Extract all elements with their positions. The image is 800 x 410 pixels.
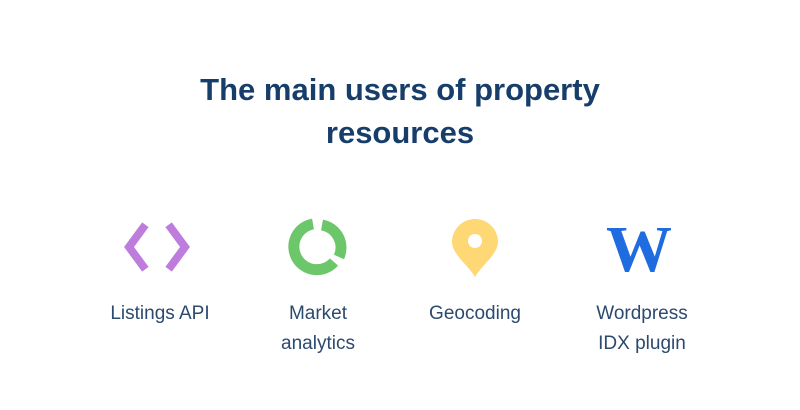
icon: code brackets [129,228,185,266]
label: Wordpress IDX plugin [596,303,688,354]
label: Listings API: Listings API [110,303,210,324]
label: Wordpress IDX plugin: IDX plugin [598,333,686,354]
label: Wordpress IDX plugin: Wordpress [596,303,688,324]
title: The main users of property [200,72,600,107]
title [200,72,600,150]
label: Market analytics: analytics [281,333,355,354]
label: Market analytics [281,303,355,354]
icon: wordpress W: W [606,213,672,286]
title: resources [326,115,474,150]
icon: location pin [452,219,498,277]
icon: donut chart [294,224,341,270]
label: Geocoding: Geocoding [429,303,521,324]
label: Market analytics: Market [289,303,347,324]
